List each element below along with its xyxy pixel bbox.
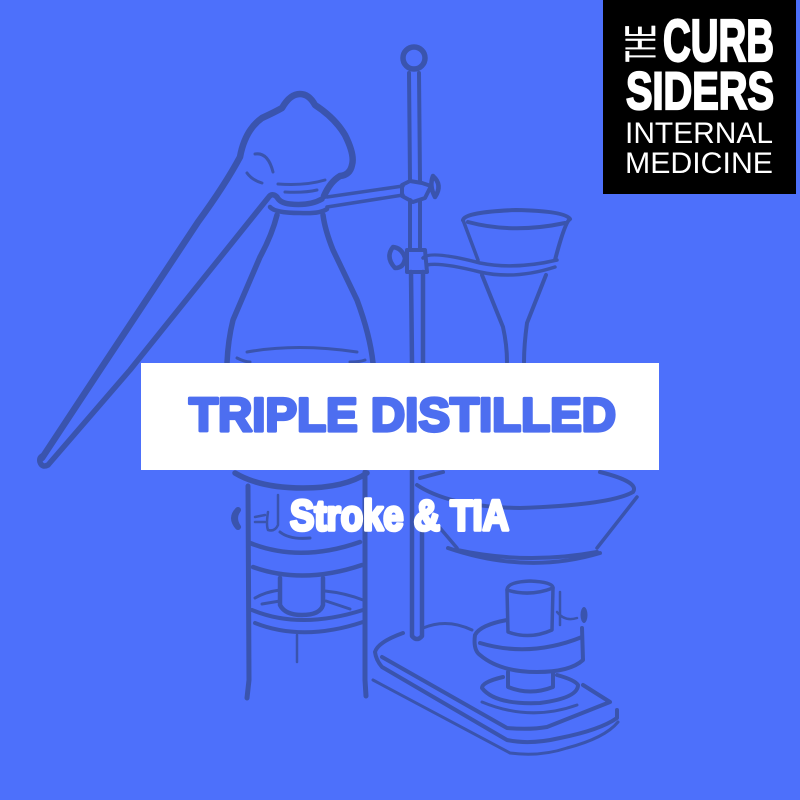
icon: spirit burner xyxy=(475,581,588,713)
logo word: medicine: MEDICINE xyxy=(625,147,773,180)
title banner xyxy=(141,363,659,470)
logo: the curbsiders internal medicine xyxy=(603,0,796,194)
icon: upper clamp xyxy=(327,176,439,207)
icon: retort vessel xyxy=(40,94,353,466)
heading: triple distilled: TRIPLE DISTILLED xyxy=(189,388,616,441)
icon: left burner stand xyxy=(234,472,366,698)
icon: lower clamp xyxy=(389,247,557,275)
icon: stand base xyxy=(373,623,618,754)
icon: evaporating bowl xyxy=(417,472,637,563)
subtitle: Stroke & TIA xyxy=(290,492,509,540)
icon: flask xyxy=(227,215,373,488)
illustration: distillation apparatus xyxy=(40,47,637,754)
logo word: internal: INTERNAL xyxy=(625,117,773,150)
icon: retort stand rod xyxy=(403,47,425,639)
icon: funnel xyxy=(463,210,570,362)
